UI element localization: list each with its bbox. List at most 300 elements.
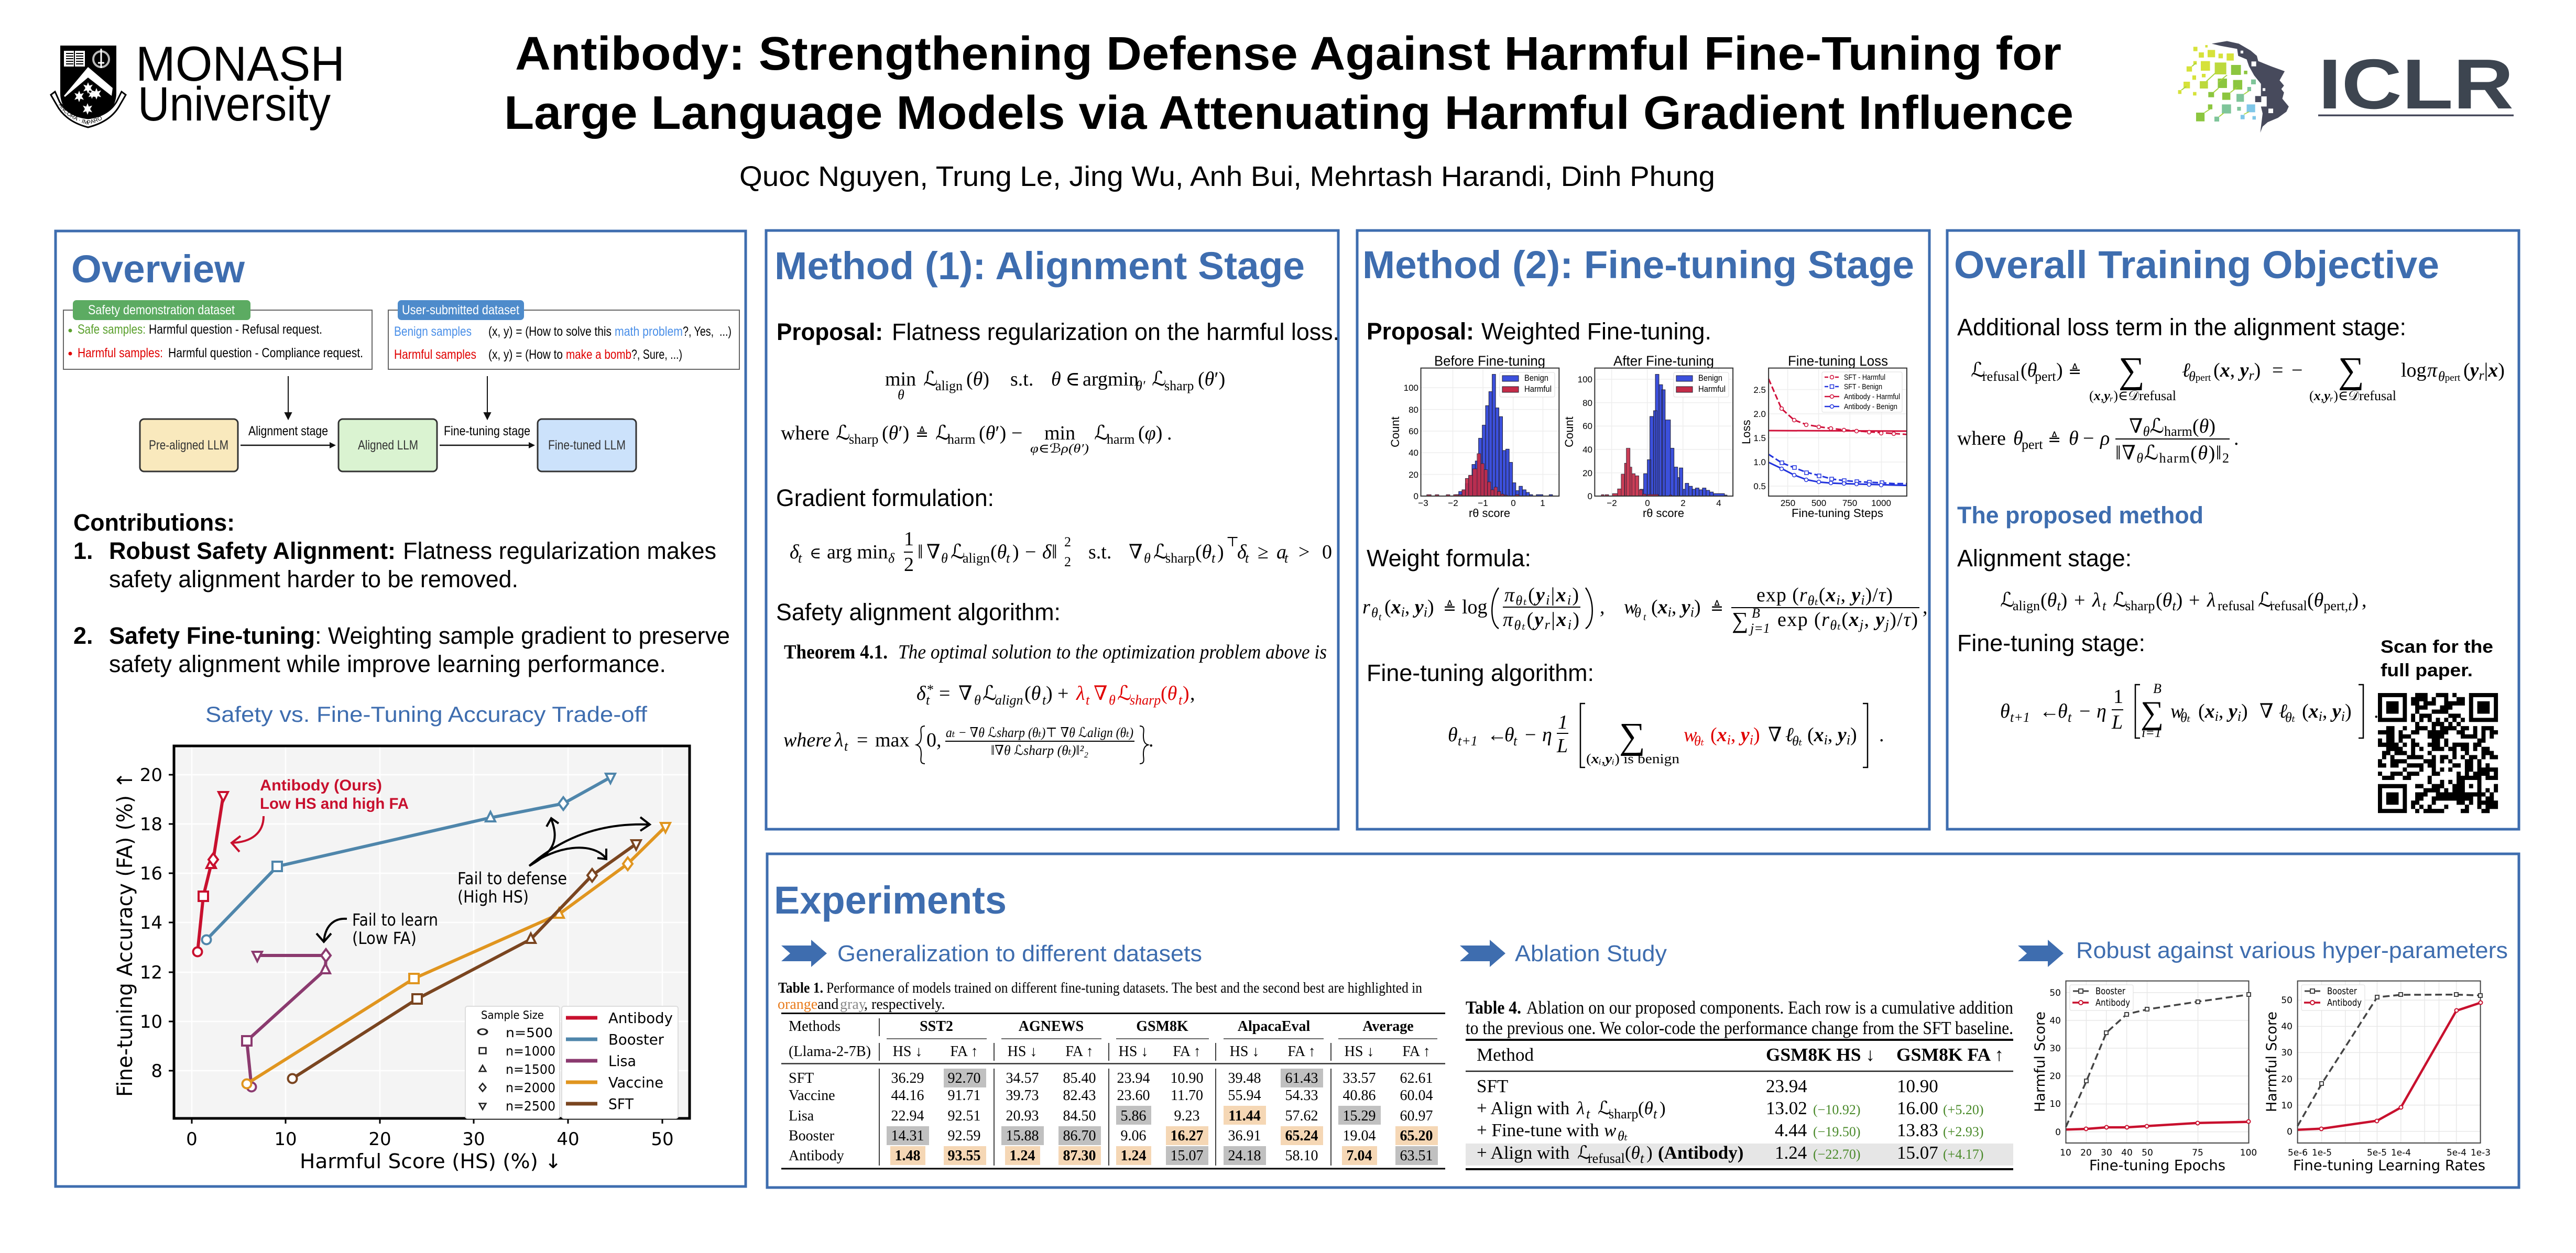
formula: refusal loss: y bbox=[2468, 359, 2479, 381]
legend: before: Harmful bbox=[1524, 384, 1552, 394]
y axis tick labels: 8 bbox=[151, 1061, 162, 1082]
row: SFT baseline: 10.90 bbox=[1897, 1076, 1938, 1096]
formula: alignment objective: − bbox=[1011, 422, 1022, 444]
formula: gradient: t bbox=[1245, 551, 1249, 566]
formula: refusal loss: ( bbox=[2021, 359, 2027, 381]
legend: before: Benign bbox=[1524, 373, 1548, 383]
row: Antibody: 15.07 bbox=[1171, 1148, 1203, 1164]
subheading: ablation study: Ablation Study bbox=[1515, 941, 1667, 966]
formula: optimal solution: = bbox=[857, 729, 868, 751]
chart: after fine-tuning histogram: 80 bbox=[1582, 398, 1592, 408]
formula: theta pert: ℒ bbox=[2144, 442, 2158, 464]
formula: alignment objective bbox=[781, 368, 1225, 456]
table header: Methods bbox=[789, 1018, 841, 1035]
formula: fine-tuning stage: x bbox=[2204, 700, 2215, 722]
table 1 bbox=[778, 980, 1445, 1169]
legend: loss bbox=[1822, 372, 1902, 412]
formula: fine-tuning stage: η bbox=[2097, 700, 2106, 722]
row: SFT: 33.57 bbox=[1342, 1070, 1376, 1086]
callout: Fail to learn: Fail to learn bbox=[352, 910, 438, 930]
formula: fine-tuning update: ← bbox=[1487, 724, 1507, 746]
formula: optimal solution: θ bbox=[974, 693, 981, 708]
formula: alignment stage: ℒ bbox=[2000, 589, 2014, 611]
chart: before fine-tuning histogram: −2 bbox=[1448, 498, 1458, 508]
row: SFT: SFT bbox=[789, 1070, 814, 1086]
formula: theta pert: − bbox=[2083, 427, 2094, 449]
legend: sample size: Sample Size bbox=[481, 1009, 544, 1021]
formula: theta pert: pert bbox=[2022, 437, 2043, 452]
row: Antibody: Antibody bbox=[789, 1148, 844, 1164]
formula: gradient: ℒ bbox=[1153, 541, 1167, 563]
formula: fine-tuning stage: i bbox=[2215, 709, 2219, 724]
formula: weight: B bbox=[1752, 606, 1760, 621]
chart: after fine-tuning histogram: 20 bbox=[1582, 468, 1592, 478]
authors: Quoc Nguyen, Trung Le, Jing Wu, Anh Bui, Mehrtash Harandi, Dinh Phung bbox=[739, 161, 1715, 192]
text: weight formula: Weight formula: bbox=[1367, 545, 1531, 571]
formula: optimal solution: λ bbox=[1076, 683, 1085, 705]
legend: before bbox=[1500, 372, 1555, 397]
row: fine-tune with weight: 13.83 bbox=[1897, 1120, 1938, 1140]
box: safety demonstration dataset: Safe samples: bbox=[78, 322, 146, 337]
y axis tick labels: 14 bbox=[140, 913, 162, 933]
row: align with sharp loss bbox=[1477, 1098, 1983, 1122]
formula: weight: x bbox=[1657, 596, 1668, 618]
formula: fine-tuning update: ∇ bbox=[1768, 724, 1782, 746]
panel: overall training objective bbox=[1947, 230, 2519, 829]
box: safety demonstration dataset: Harmful samples: bbox=[78, 346, 163, 360]
row: align with sharp loss: ) bbox=[1660, 1098, 1666, 1118]
formula: optimal solution: align bbox=[995, 693, 1023, 708]
formula: refusal loss bbox=[1971, 350, 2505, 403]
formula: gradient: 0 bbox=[1322, 541, 1332, 563]
box: safety demonstration dataset bbox=[63, 300, 372, 369]
row: Vaccine: Vaccine bbox=[789, 1087, 835, 1104]
formula: theta pert: harm bbox=[2159, 450, 2190, 466]
table header: SST2 bbox=[920, 1018, 953, 1035]
chart: harmful score vs learning rates: 1e-5 bbox=[2312, 1148, 2332, 1158]
formula: alignment objective: θ bbox=[898, 387, 904, 402]
formula: alignment objective: where bbox=[781, 422, 829, 444]
formula: fine-tuning stage: y bbox=[2330, 700, 2341, 722]
formula: gradient: 2 bbox=[904, 554, 914, 576]
formula: theta pert: ρ bbox=[2100, 427, 2110, 449]
formula: alignment stage: θ bbox=[2314, 589, 2323, 611]
text: theorem 4.1: The optimal solution to the optimization problem above is bbox=[898, 641, 1327, 663]
chart: after fine-tuning histogram: After Fine-tuning bbox=[1613, 353, 1714, 369]
heading: Overall Training Objective: Overall Training Objective bbox=[1954, 243, 2439, 287]
formula: gradient: θ bbox=[997, 541, 1007, 563]
row: fine-tune with weight: (+2.93) bbox=[1943, 1124, 1983, 1139]
box: safety demonstration dataset: Harmful question - Compliance request. bbox=[168, 346, 363, 360]
box: user-submitted dataset: ?, Yes, ...) bbox=[683, 324, 732, 339]
chart: harmful score vs learning rates bbox=[2264, 981, 2491, 1174]
formula: fine-tuning update: . bbox=[1879, 724, 1884, 746]
table header: FA ↑ bbox=[1173, 1043, 1201, 1060]
formula: alignment stage: λ bbox=[2207, 589, 2215, 611]
formula: weight: y bbox=[1850, 584, 1861, 606]
chart: harmful score vs epochs: 30 bbox=[2101, 1148, 2112, 1158]
table header bbox=[789, 1018, 1431, 1060]
text: alignment stage: Alignment stage: bbox=[1957, 545, 2132, 571]
row: Antibody bbox=[789, 1148, 1433, 1164]
row: Booster: 9.06 bbox=[1120, 1128, 1147, 1144]
formula: fine-tuning update: , bbox=[1828, 724, 1838, 746]
formula: optimal solution: sharp bbox=[1130, 693, 1161, 708]
row: Booster bbox=[789, 1128, 1433, 1144]
row: fine-tune with weight: θₜ bbox=[1618, 1128, 1628, 1144]
legend: sample size bbox=[465, 1006, 560, 1118]
formula: weight: )/ bbox=[1890, 609, 1903, 631]
text: scan for the full paper: Scan for the bbox=[2381, 637, 2493, 657]
row: Antibody full method: (−22.70) bbox=[1813, 1147, 1860, 1162]
row: Lisa: Lisa bbox=[789, 1108, 814, 1124]
formula: weight: i bbox=[1668, 604, 1672, 620]
legend: sample size: n=1000 bbox=[506, 1043, 555, 1059]
formula: refusal loss: θ bbox=[2027, 359, 2037, 381]
heading: Method (2): Method (2): Fine-tuning Stage bbox=[1362, 243, 1914, 287]
chart: before fine-tuning histogram: −1 bbox=[1478, 498, 1488, 508]
row: align with sharp loss: (+5.20) bbox=[1943, 1102, 1983, 1117]
row: SFT: 36.29 bbox=[891, 1070, 924, 1086]
row: Antibody: 1.24 bbox=[1009, 1148, 1035, 1164]
text: MONASH: MONASH bbox=[136, 36, 345, 91]
formula: gradient: θ bbox=[1144, 551, 1151, 566]
chart: before fine-tuning histogram: 1 bbox=[1540, 498, 1545, 508]
formula: refusal loss: π bbox=[2427, 359, 2438, 381]
legend: epochs: Antibody bbox=[2095, 997, 2130, 1008]
chart: before fine-tuning histogram: 0 bbox=[1414, 491, 1418, 501]
chart: harmful score vs epochs: Harmful Score bbox=[2032, 1012, 2048, 1112]
flow: LLM stages: Fine-tuning stage bbox=[444, 424, 530, 438]
formula: weight: exp (r bbox=[1777, 609, 1829, 631]
formula: gradient: ≥ bbox=[1258, 541, 1269, 563]
formula: refusal loss: r bbox=[2479, 368, 2485, 383]
row: Vaccine: 11.70 bbox=[1171, 1087, 1203, 1104]
row: Antibody full method: (Antibody) bbox=[1658, 1142, 1743, 1163]
markers: learning rates bbox=[2319, 993, 2483, 1130]
chart: before fine-tuning histogram: 100 bbox=[1404, 383, 1418, 393]
formula: fine-tuning stage: θ bbox=[2000, 700, 2010, 722]
table header: HS ↓ bbox=[1345, 1043, 1374, 1060]
chart: harmful score vs learning rates: 5e-6 bbox=[2288, 1148, 2308, 1158]
formula: weight: | bbox=[1551, 609, 1555, 631]
formula: gradient: θ bbox=[941, 551, 948, 566]
formula: weight: ( bbox=[1526, 609, 1533, 631]
row: align with sharp loss: + Align with bbox=[1477, 1098, 1570, 1118]
formula: alignment objective: ( bbox=[882, 422, 889, 444]
text: contributions: Contributions: bbox=[73, 509, 235, 536]
row: SFT: 39.48 bbox=[1228, 1070, 1261, 1086]
formula: refusal loss: θ bbox=[2438, 369, 2445, 384]
chart: harmful score vs epochs: 20 bbox=[2080, 1148, 2092, 1158]
formula: fine-tuning stage: i bbox=[2319, 709, 2322, 724]
formula: weight: ) bbox=[1573, 609, 1579, 631]
chart: harmful score vs learning rates: 5e-4 bbox=[2447, 1148, 2466, 1158]
chart: harmful score vs epochs: 0 bbox=[2055, 1127, 2061, 1138]
formula: optimal solution: ) bbox=[1183, 683, 1189, 705]
chart: fine-tuning loss: 500 bbox=[1811, 498, 1826, 508]
formula: weight: θₜ bbox=[1830, 618, 1841, 633]
text: contributions: safety alignment harder to be removed. bbox=[109, 566, 518, 592]
chart: after fine-tuning histogram: 40 bbox=[1582, 445, 1592, 455]
formula: alignment stage: θ bbox=[2047, 589, 2057, 611]
row: SFT: 92.70 bbox=[947, 1070, 981, 1086]
formula: optimal solution: where bbox=[783, 729, 832, 751]
formula: alignment objective: sharp bbox=[1164, 378, 1194, 393]
formula: weight: θₜ bbox=[1808, 593, 1818, 608]
chart: after fine-tuning histogram: −2 bbox=[1607, 498, 1617, 508]
y axis label: Fine-tuning Accuracy (FA) (%) ↑ bbox=[113, 772, 137, 1097]
row: Antibody full method: + Align with bbox=[1477, 1142, 1570, 1163]
formula: refusal loss: ∑ bbox=[2119, 350, 2145, 391]
chart: before fine-tuning histogram: 60 bbox=[1409, 426, 1418, 436]
formula: fine-tuning stage: θ bbox=[2058, 700, 2068, 722]
formula: fine-tuning stage: ( bbox=[2198, 700, 2205, 722]
series: Vaccine bbox=[242, 823, 670, 1089]
formula: optimal solution: ∇ bbox=[958, 683, 973, 705]
text: contributions: Robust Safety Alignment: bbox=[109, 537, 396, 564]
caption: table 1: Table 1. bbox=[778, 980, 823, 996]
arrow: ablation bbox=[1460, 940, 1505, 967]
formula: fine-tuning stage: ℓ bbox=[2279, 700, 2287, 722]
formula: fine-tuning update: θ bbox=[1504, 724, 1514, 746]
row: SFT: 62.61 bbox=[1400, 1070, 1433, 1086]
y axis tick labels bbox=[140, 765, 162, 1082]
chart: harmful score vs learning rates: 10 bbox=[2281, 1101, 2293, 1111]
callout: Fail to learn: (Low FA) bbox=[352, 928, 417, 948]
row: Lisa bbox=[789, 1108, 1433, 1124]
text: proposal: Proposal: bbox=[777, 318, 883, 345]
row: Lisa: 11.44 bbox=[1228, 1108, 1261, 1124]
heading: trade-off chart: Safety vs. Fine-Tuning Accuracy Trade-off bbox=[205, 702, 647, 727]
formula: alignment objective: sharp bbox=[849, 432, 878, 447]
text: proposal bbox=[1367, 318, 1711, 345]
row: Antibody full method: ) bbox=[1646, 1142, 1653, 1163]
chart: fine-tuning loss: Fine-tuning Steps bbox=[1792, 507, 1883, 520]
formula: refusal loss: ℓ bbox=[2182, 359, 2190, 381]
row: Vaccine: 91.71 bbox=[947, 1087, 981, 1104]
formula: alignment objective: ℒ bbox=[1094, 422, 1108, 444]
formula: weight: ( bbox=[1651, 596, 1658, 618]
formula: alignment objective: ( bbox=[1138, 422, 1145, 444]
caption: table 4: Table 4. bbox=[1466, 997, 1521, 1018]
formula: fine-tuning stage: x bbox=[2308, 700, 2319, 722]
markers: loss curves bbox=[1780, 406, 1896, 487]
row: Antibody full method: (+4.17) bbox=[1943, 1147, 1983, 1162]
legend: after bbox=[1674, 372, 1729, 397]
chart: harmful score vs epochs: Fine-tuning Epochs bbox=[2089, 1157, 2225, 1174]
formula: fine-tuning update: x bbox=[1814, 724, 1824, 746]
formula: alignment stage: ℒ bbox=[2258, 589, 2272, 611]
text: ICLR: ICLR bbox=[2318, 45, 2514, 124]
formula: alignment stage: ( bbox=[2156, 589, 2163, 611]
series: SFT bbox=[288, 840, 641, 1083]
text: theorem 4.1: Theorem 4.1. bbox=[784, 641, 888, 663]
formula: weight: i bbox=[1690, 604, 1694, 620]
chart: before fine-tuning histogram: Before Fine-tuning bbox=[1434, 353, 1545, 369]
formula: optimal solution: θ bbox=[1031, 683, 1041, 705]
formula: alignment stage: ) bbox=[2061, 589, 2067, 611]
formula: gradient: 2 bbox=[1064, 534, 1071, 549]
formula: theta pert: where bbox=[1957, 427, 2006, 449]
formula: alignment stage: θ bbox=[2163, 589, 2172, 611]
formula: fine-tuning stage: ∑ bbox=[2141, 695, 2164, 731]
formula: refusal loss: ( bbox=[2213, 359, 2220, 381]
heading: Method (1): Method (1): Alignment Stage bbox=[774, 244, 1305, 288]
formula: weight: | bbox=[1551, 584, 1555, 606]
row: Antibody: 93.55 bbox=[947, 1148, 981, 1164]
row: align with sharp loss: t bbox=[1653, 1106, 1657, 1122]
formula: alignment objective: argmin bbox=[1083, 368, 1139, 390]
formula: weight: ) bbox=[1427, 596, 1434, 618]
callout: Fail to defense: Fail to defense bbox=[457, 869, 567, 888]
chart: fine-tuning loss: Fine-tuning Loss bbox=[1788, 353, 1888, 369]
row: align with sharp loss: 13.02 bbox=[1766, 1098, 1807, 1118]
formula: fine-tuning update bbox=[1448, 704, 1884, 767]
formula: optimal solution: ℒ bbox=[983, 683, 997, 705]
table header: FA ↑ bbox=[1065, 1043, 1094, 1060]
formula: theta pert: . bbox=[2234, 427, 2239, 449]
formula: fine-tuning stage: ( bbox=[2302, 700, 2309, 722]
table header: FA ↑ bbox=[1402, 1043, 1431, 1060]
formula: refusal loss: pert bbox=[2445, 372, 2461, 383]
formula: weight: ( bbox=[1528, 584, 1535, 606]
formula: weight: y bbox=[1873, 609, 1884, 631]
formula: refusal loss: = bbox=[2272, 359, 2283, 381]
formula: refusal loss: ℒ bbox=[1971, 359, 1985, 381]
formula: fine-tuning stage: y bbox=[2226, 700, 2237, 722]
formula: alignment objective: min bbox=[885, 368, 916, 390]
formula: weight: i bbox=[1424, 604, 1427, 620]
formula: gradient: 2 bbox=[1064, 554, 1071, 569]
legend: epochs: Booster bbox=[2095, 986, 2125, 997]
arrow: generalization bbox=[781, 940, 827, 967]
formula: gradient: > bbox=[1298, 541, 1309, 563]
formula: weight: , bbox=[1600, 596, 1604, 618]
chart: harmful score vs learning rates: 1e-3 bbox=[2471, 1148, 2491, 1158]
text: contributions bbox=[73, 509, 730, 677]
chart: harmful score vs epochs: 10 bbox=[2049, 1099, 2061, 1109]
formula: refusal loss: (x,yᵣ)∈𝒟refusal bbox=[2309, 388, 2396, 403]
y axis tick labels: 20 bbox=[140, 765, 162, 786]
formula: fine-tuning update: (xᵢ,yᵢ) is benign bbox=[1586, 751, 1679, 766]
legend: methods: Vaccine bbox=[608, 1074, 663, 1091]
formula: optimal solution: θ bbox=[1109, 693, 1116, 708]
formula: refusal loss: − bbox=[2291, 359, 2302, 381]
table 4 header: GSM8K HS ↓ bbox=[1766, 1045, 1875, 1065]
text: contributions: : Weighting sample gradient to preserve bbox=[315, 622, 730, 649]
x axis tick labels bbox=[186, 1129, 674, 1150]
row: Vaccine: 55.94 bbox=[1228, 1087, 1261, 1104]
row: Antibody: 1.48 bbox=[895, 1148, 920, 1164]
formula: weight: , bbox=[1405, 596, 1415, 618]
formula: alignment objective: align bbox=[935, 378, 963, 393]
formula: alignment stage: align bbox=[2013, 598, 2040, 613]
chart: fine-tuning loss: 2.5 bbox=[1753, 385, 1766, 395]
row: Antibody full method: θ bbox=[1631, 1142, 1640, 1163]
formula: alignment objective: ( bbox=[979, 422, 986, 444]
series: Lisa bbox=[242, 949, 331, 1092]
box: user-submitted dataset: (x, y) = (How to solve this bbox=[488, 324, 612, 339]
formula: alignment stage: sharp bbox=[2125, 598, 2155, 613]
formula: theta pert: harm bbox=[2164, 424, 2192, 439]
formula: optimal solution: ∇ bbox=[1094, 683, 1108, 705]
formula: refusal loss: ∑ bbox=[2338, 350, 2364, 391]
formula: weight bbox=[1362, 584, 1927, 636]
legend: methods: Antibody bbox=[608, 1009, 673, 1027]
formula: fine-tuning update: y bbox=[1836, 724, 1847, 746]
row: Antibody: 63.51 bbox=[1400, 1148, 1433, 1164]
chart: fine-tuning loss: 250 bbox=[1781, 498, 1795, 508]
formula: fine-tuning update: L bbox=[1556, 735, 1568, 757]
table header: FA ↑ bbox=[950, 1043, 978, 1060]
row: Booster: 14.31 bbox=[891, 1128, 924, 1144]
formula: fine-tuning update: θₜ bbox=[1694, 733, 1705, 749]
QR code bbox=[2378, 695, 2498, 811]
chart: harmful score vs epochs: 50 bbox=[2142, 1148, 2153, 1158]
formula: alignment stage: refusal bbox=[2270, 598, 2307, 613]
arrow: dataset to fine-tuning stage bbox=[484, 376, 490, 419]
formula: gradient: − bbox=[1025, 541, 1036, 563]
chart: harmful score vs learning rates: 0 bbox=[2287, 1127, 2293, 1137]
row: SFT: 85.40 bbox=[1063, 1070, 1096, 1086]
formula: alignment objective: ℒ bbox=[935, 422, 949, 444]
panel: method 2 fine-tuning stage bbox=[1357, 230, 1929, 829]
formula: weight: i bbox=[1568, 617, 1571, 632]
legend: epochs bbox=[2070, 985, 2133, 1010]
text: proposal: Flatness regularization on the harmful loss. bbox=[892, 318, 1339, 345]
row: Vaccine bbox=[789, 1087, 1433, 1104]
legend: loss: Antibody - Harmful bbox=[1844, 392, 1900, 401]
formula: alignment stage: + bbox=[2074, 589, 2085, 611]
formula: weight: π bbox=[1503, 609, 1513, 631]
chart: harmful score vs learning rates: 5e-5 bbox=[2367, 1148, 2387, 1158]
formula: theta pert: θ bbox=[2136, 450, 2143, 466]
chart: before fine-tuning histogram: 40 bbox=[1409, 448, 1418, 458]
formula: weight: j bbox=[1884, 617, 1889, 632]
chart: after fine-tuning histogram: rθ score bbox=[1643, 507, 1684, 520]
row: Lisa: 92.51 bbox=[947, 1108, 981, 1124]
formula: gradient: align bbox=[963, 551, 990, 566]
formula: refusal loss: x) bbox=[2488, 359, 2505, 381]
x axis tick labels: 0 bbox=[186, 1129, 198, 1150]
formula: gradient: ℒ bbox=[951, 541, 965, 563]
row: align with sharp loss: ( bbox=[1638, 1098, 1644, 1118]
caption: table 1: Performance of models trained on different fine-tuning datasets. The best and the second best are highlighted in bbox=[826, 980, 1422, 996]
formula: weight: i bbox=[1546, 592, 1549, 608]
caption: table 4: to the previous one. We color-code the performance change from the SFT baseline. bbox=[1466, 1018, 2013, 1038]
row: Lisa: 60.97 bbox=[1400, 1108, 1433, 1124]
formula: gradient: θ bbox=[1202, 541, 1211, 563]
chart: harmful score vs epochs: 50 bbox=[2049, 988, 2061, 998]
flow: LLM stages: Pre-aligned LLM bbox=[149, 438, 228, 453]
formula: weight: , bbox=[1841, 584, 1851, 606]
legend: methods: SFT bbox=[608, 1095, 634, 1113]
formula: weight: i bbox=[1861, 592, 1865, 608]
logo: ICLR bbox=[2178, 41, 2514, 133]
formula: gradient: ∇ bbox=[926, 541, 941, 563]
text: contributions: Flatness regularization makes bbox=[403, 537, 716, 564]
chart: harmful score vs learning rates: Fine-tuning Learning Rates bbox=[2293, 1157, 2485, 1174]
row: Antibody full method: ℒ bbox=[1577, 1142, 1590, 1163]
formula: weight: j=1 bbox=[1749, 621, 1770, 636]
formula: alignment objective: ℒ bbox=[1152, 368, 1166, 390]
formula: weight: t bbox=[1379, 612, 1382, 623]
chart: fine-tuning loss: 1.5 bbox=[1753, 433, 1766, 443]
formula: gradient: t bbox=[1284, 551, 1289, 566]
formula: gradient: arg min bbox=[827, 541, 888, 563]
formula: alignment stage: + bbox=[2189, 589, 2200, 611]
